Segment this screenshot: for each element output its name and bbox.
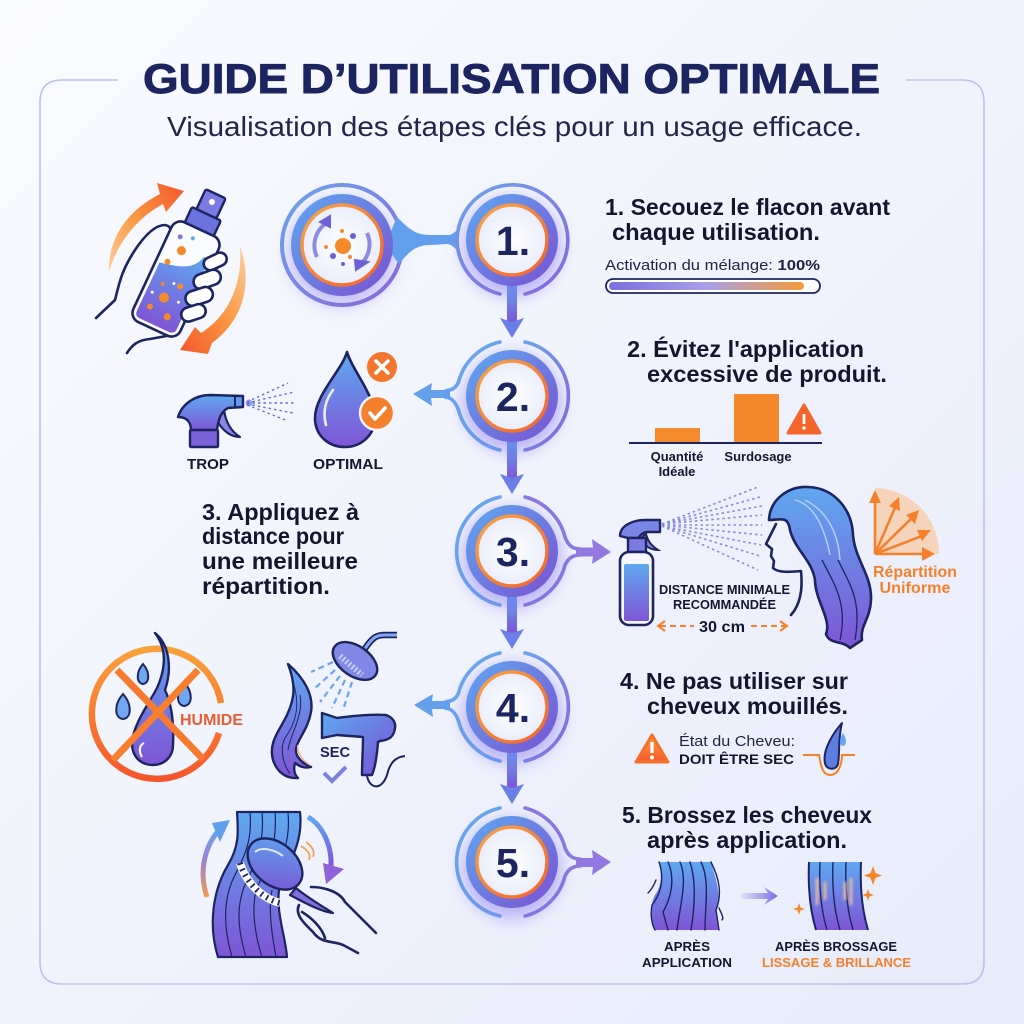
step 5 text [622,802,872,853]
icon: hair follicle [803,723,855,775]
arrow right [576,850,611,875]
step 2 node [413,342,568,453]
icon: prohibited wet hair: HUMIDE [180,712,243,729]
label: OPTIMAL: OPTIMAL [313,456,383,473]
progress bar: activation 100%: Activation du mélange: 100% [605,257,820,274]
connector to step 1 [385,217,459,264]
label: Répartition Uniforme: Uniforme [880,580,951,597]
arrow left [414,694,450,717]
step 1 text [605,194,890,245]
progress bar: activation 100% [605,257,820,293]
icon: shaking bottle in hand [96,183,246,354]
label: Répartition Uniforme [873,564,957,597]
distance label: DISTANCE MINIMALE [659,582,790,597]
step 4 node: 4. [496,685,530,731]
flow connectors [500,284,524,804]
step 3 text [202,499,359,599]
bar chart: quantity [629,394,822,479]
label: TROP: TROP [187,456,229,473]
step 1 node: 1. [496,218,530,264]
subtitle: Visualisation des étapes clés pour un usage efficace. [167,111,862,142]
step 4 text [620,668,848,719]
icon: prohibited wet hair [92,633,243,779]
icon: smooth shiny hair [793,862,882,930]
icon: hair after application [648,862,723,930]
warning: hair state [636,733,795,767]
step 4 text: 4. Ne pas utiliser sur [620,668,848,694]
label: after application: APPLICATION [642,955,732,970]
arrow right [576,539,611,564]
step 3 text: répartition. [202,573,330,599]
step 3 node: 3. [496,529,530,575]
step 3 text: 3. Appliquez à [202,499,359,525]
label: after brushing [762,939,911,970]
warning: hair state: DOIT ÊTRE SEC [679,750,794,767]
warning icon [788,405,820,433]
label: after application: APRÈS [664,939,710,954]
step 3 text: une meilleure [202,548,358,574]
step 4 node [414,653,568,764]
icon: spray nozzle TROP [178,383,296,447]
arrow left [413,383,450,406]
distance label [658,582,790,636]
step 3 text: distance pour [202,523,344,549]
spray mist [662,487,762,570]
bar chart: quantity: Surdosage [724,449,792,464]
arrow: before to after [741,887,778,905]
bar chart: quantity: Quantité [651,449,703,464]
step 3 node [457,497,611,608]
icon: hair, shower and dryer: SEC [320,744,350,761]
icon: woman profile with long hair [766,487,871,648]
icon: hair, shower and dryer [272,634,405,786]
step 1 node [457,185,568,297]
distance label: 30 cm [699,619,745,636]
distance label: RECOMMANDÉE [673,597,776,612]
icon: brushing hair [203,812,376,957]
distance arrows [658,621,787,631]
step 2 text: 2. Évitez l'application [627,335,864,362]
icon: spray bottle [620,520,660,625]
step 2 text [627,335,887,387]
icon: water drop with badges [315,352,397,447]
step 1 text: chaque utilisation. [612,219,820,245]
step 5 node: 5. [496,840,530,886]
step 5 text: 5. Brossez les cheveux [622,802,872,828]
step 4 text: cheveux mouillés. [647,693,848,719]
warning: hair state: État du Cheveu: [679,733,795,750]
title: GUIDE D’UTILISATION OPTIMALE [143,55,880,102]
label: after application [642,939,732,970]
step 5 node [457,808,611,919]
bar chart: quantity: Idéale [659,464,695,479]
label: Répartition Uniforme: Répartition [873,564,957,581]
label: after brushing: LISSAGE & BRILLANCE [762,955,911,970]
mixing illustration node [282,185,459,306]
icon: fan distribution [869,488,939,561]
step 2 node: 2. [496,374,530,420]
step 1 text: 1. Secouez le flacon avant [605,194,890,220]
step 2 text: excessive de produit. [647,361,887,387]
step 5 text: après application. [647,827,847,853]
label: after brushing: APRÈS BROSSAGE [775,939,897,954]
